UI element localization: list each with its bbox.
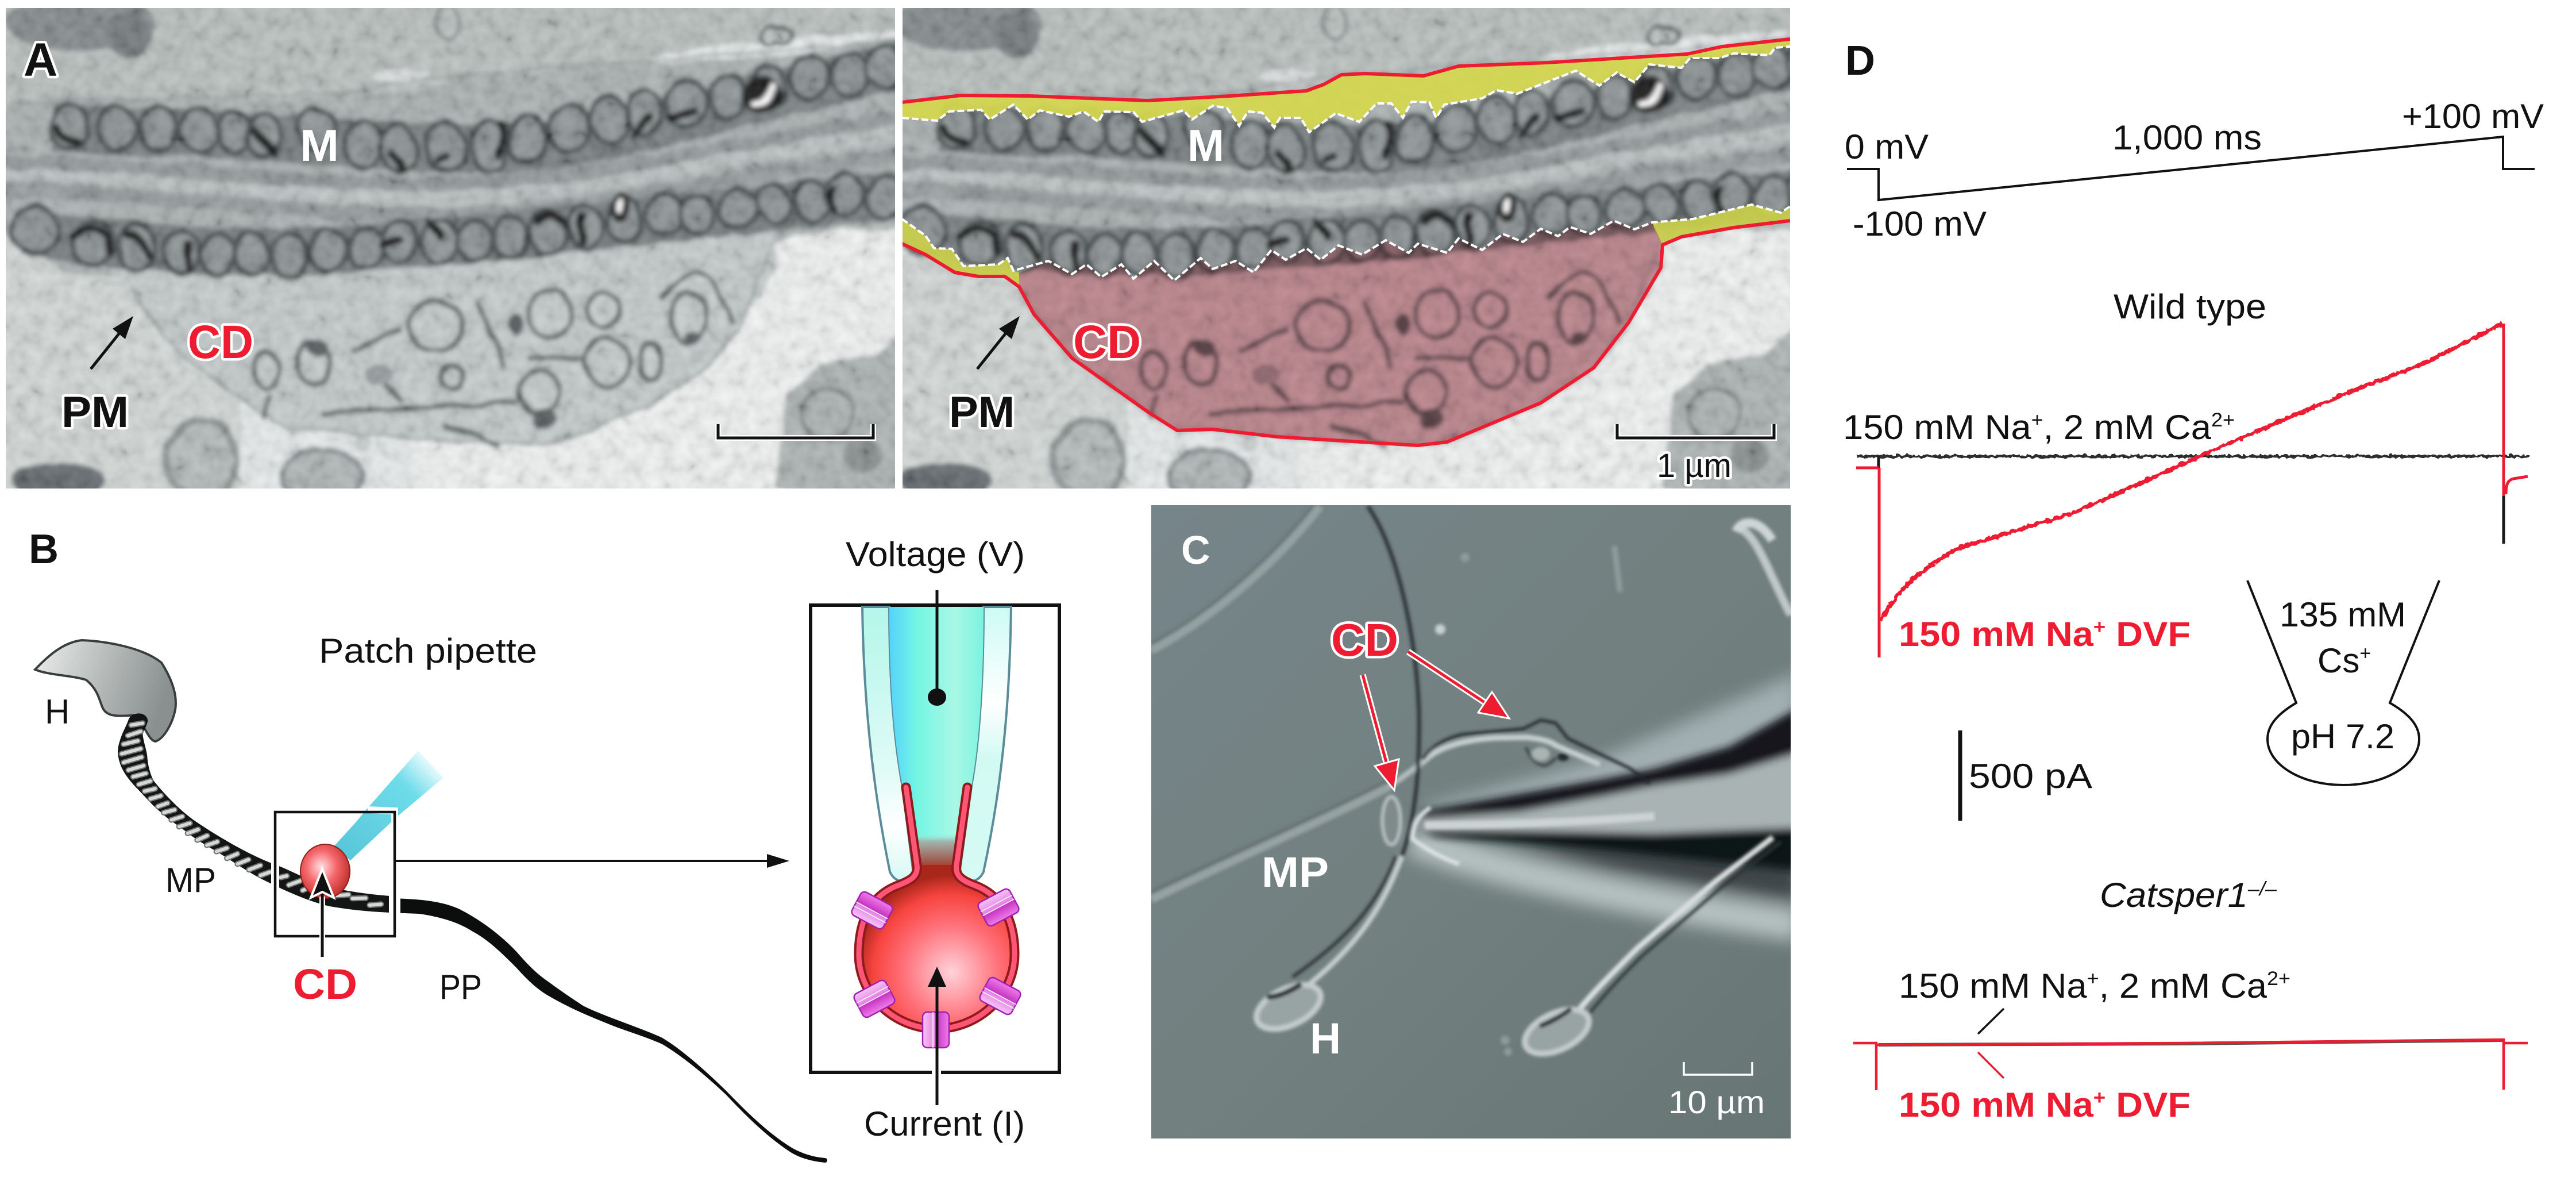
arrow to CD	[311, 869, 334, 957]
red DVF trace	[1881, 324, 2502, 621]
red tick	[1978, 1052, 2004, 1078]
label DVF knockout: DVF	[2105, 1086, 2191, 1124]
yellow lower left band	[902, 219, 1019, 287]
label CD: CD	[1331, 614, 1398, 666]
red plasma membrane bottom	[902, 221, 1790, 445]
red plasma membrane top	[902, 39, 1790, 102]
zoom box	[275, 810, 395, 936]
scale bar	[1617, 424, 1774, 438]
label MP: MP	[165, 861, 216, 899]
label M: M	[300, 120, 339, 171]
inset box	[811, 605, 1059, 1072]
label control solution wild type: 150 mM Na	[1843, 408, 2021, 447]
panel letter D: D	[1845, 38, 1875, 84]
label control solution knockout: 2+	[2267, 968, 2290, 990]
sperm head	[35, 640, 176, 741]
dashed white outline bottom	[902, 205, 1790, 280]
right glass wall	[959, 607, 1011, 882]
pipette lumen	[889, 607, 984, 868]
label 0 mV: 0 mV	[1845, 128, 1929, 166]
left glass wall	[862, 607, 913, 882]
label Voltage: Voltage (V)	[846, 535, 1025, 574]
channels	[850, 887, 1022, 1048]
label DVF knockout: 150 mM Na	[1899, 1086, 2078, 1124]
micrograph image	[1151, 505, 1798, 1138]
label Catsper1 knockout: Catsper1	[2100, 876, 2239, 914]
black transient spikes	[1879, 456, 2504, 544]
label 500 pA: 500 pA	[1969, 757, 2092, 795]
dashed white outline top	[902, 47, 1790, 132]
cytoplasmic droplet ball	[300, 844, 350, 898]
sperm midpiece	[118, 713, 390, 913]
patch pipette in overview	[333, 751, 444, 860]
red verticals and baseline	[1856, 324, 2528, 657]
scale label 10 micrometre: 10 µm	[1668, 1084, 1765, 1120]
panel C: micrograph of patched sperm	[1151, 505, 1798, 1138]
label 135 mM: 135 mM	[2280, 595, 2406, 634]
label PP: PP	[439, 968, 482, 1006]
label DVF wild type: DVF	[2105, 615, 2191, 653]
label H: H	[45, 693, 70, 731]
label Current: Current (I)	[864, 1105, 1025, 1143]
label DVF knockout: +	[2093, 1087, 2105, 1109]
cell interior	[859, 865, 1015, 1029]
scale label 1 micrometre: 1 µm	[1657, 447, 1732, 484]
scale bar	[718, 424, 873, 438]
label control solution knockout: 150 mM Na	[1899, 967, 2077, 1005]
panel A right: colored micrograph	[903, 8, 1790, 489]
principal piece tail	[390, 898, 827, 1163]
label CD: CD	[293, 960, 357, 1008]
label DVF wild type: 150 mM Na	[1899, 615, 2078, 653]
label +100 mV: +100 mV	[2402, 97, 2544, 136]
label Wild type: Wild type	[2114, 287, 2266, 326]
label control solution wild type: +	[2031, 409, 2043, 431]
panel B: sperm schematic	[29, 526, 1059, 1163]
label control solution wild type: 2+	[2211, 409, 2235, 431]
ramp line	[1847, 137, 2535, 200]
label Cs+: +	[2359, 643, 2371, 664]
micrograph image	[0, 0, 938, 506]
label Patch pipette: Patch pipette	[319, 632, 537, 670]
wild type current traces	[1856, 324, 2528, 657]
scale bar	[1684, 1062, 1752, 1075]
label -100 mV: -100 mV	[1853, 205, 1987, 243]
panel letter C: C	[1181, 528, 1210, 572]
panel A left: electron micrograph	[0, 0, 938, 506]
label 1000 ms: 1,000 ms	[2112, 118, 2262, 157]
panel letter A: A	[24, 34, 57, 86]
label control solution wild type: , 2 mM Ca	[2043, 408, 2212, 447]
label PM: PM	[61, 388, 129, 437]
panel letter B: B	[29, 526, 59, 572]
inset pipette and cell	[811, 590, 1059, 1105]
red trace with spikes	[1853, 1040, 2528, 1090]
label Cs+: Cs	[2317, 641, 2359, 680]
black trace	[1856, 455, 2528, 457]
micrograph image and overlays	[887, 0, 1825, 506]
knockout current traces	[1853, 1040, 2528, 1090]
label PM: PM	[949, 388, 1015, 437]
pipette solution sketch	[2247, 580, 2439, 785]
arrow to plasma membrane	[977, 316, 1020, 369]
black underlying trace	[1879, 1040, 2504, 1045]
arrow to droplet right	[1408, 652, 1509, 718]
panel D: electrophysiology traces	[1843, 38, 2544, 1124]
label CD: CD	[1073, 316, 1141, 368]
label control solution knockout: +	[2087, 968, 2099, 990]
label DVF wild type: +	[2093, 616, 2105, 638]
black tick	[1978, 1009, 2004, 1034]
yellow top band	[902, 39, 1790, 132]
cell membrane	[859, 787, 1015, 1029]
arrow to droplet left	[1363, 675, 1399, 790]
voltage protocol	[1845, 97, 2544, 243]
pink cytoplasmic droplet fill	[1019, 221, 1663, 445]
label CD: CD	[188, 316, 253, 368]
current arrow	[928, 967, 946, 1105]
neck gradient	[917, 833, 956, 874]
arrow to plasma membrane	[91, 316, 133, 369]
current scale bar	[1958, 730, 1962, 821]
label control solution knockout: , 2 mM Ca	[2099, 967, 2268, 1005]
label H: H	[1310, 1014, 1341, 1063]
label Catsper1 knockout: –/–	[2247, 878, 2277, 900]
label pH 7.2: pH 7.2	[2291, 717, 2394, 756]
arrow to inset	[395, 854, 789, 868]
label M: M	[1187, 120, 1224, 171]
label MP: MP	[1262, 848, 1329, 896]
voltage electrode	[928, 590, 946, 706]
yellow lower right band	[1652, 205, 1790, 245]
pipette outline	[2247, 580, 2439, 785]
